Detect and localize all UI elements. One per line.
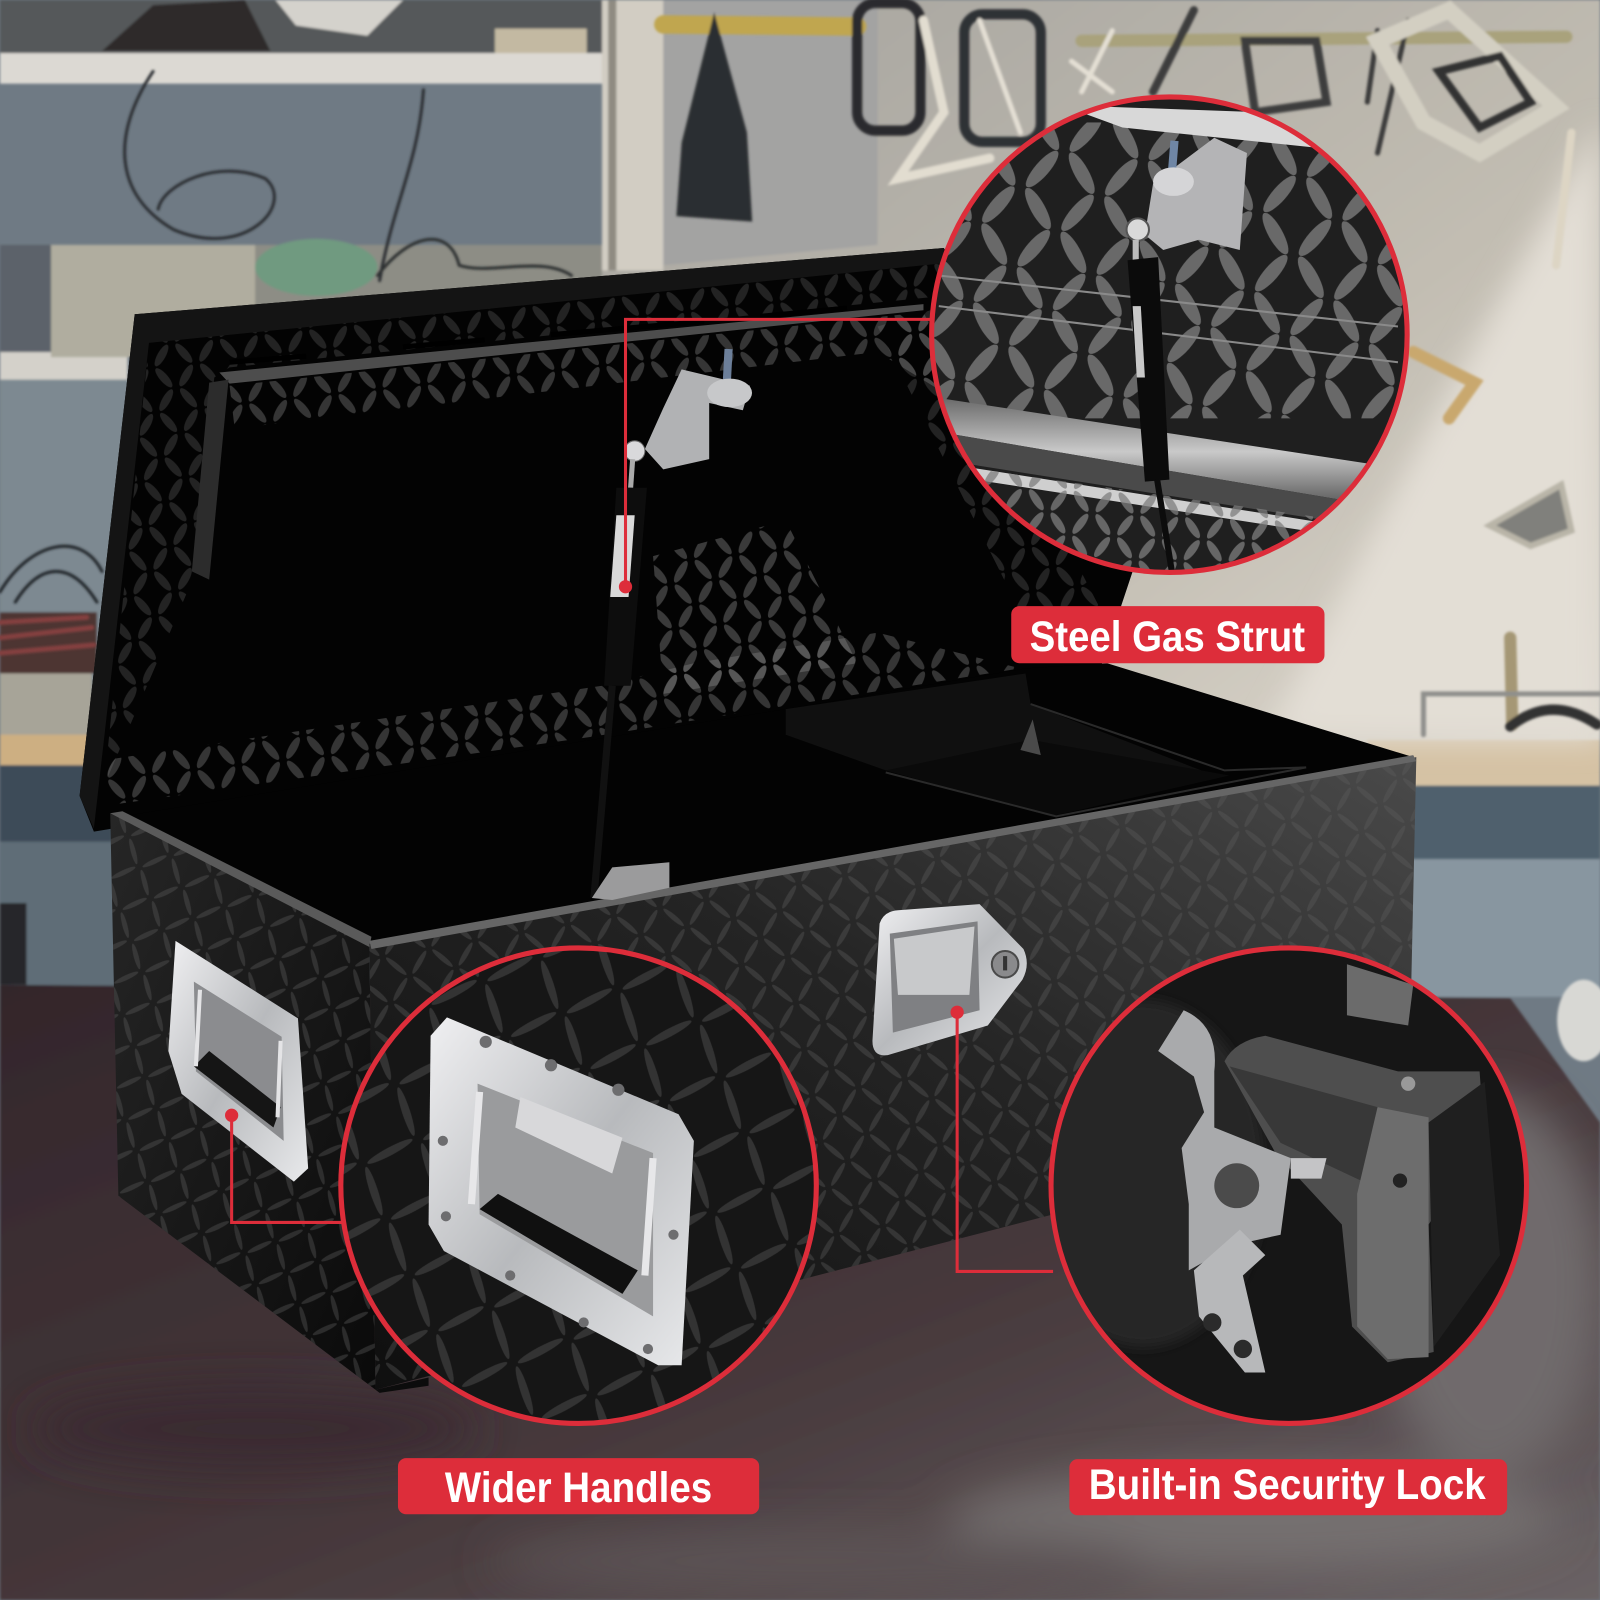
right wall [602,0,1600,745]
lid [80,248,1133,832]
connector: lock [952,1007,1053,1271]
label: built-in security lock: Built-in Security Lock [1089,1461,1486,1509]
lid center reflection [653,520,857,694]
wires [125,71,274,238]
detail circle: security lock [1048,945,1530,1426]
box interior [122,663,1413,944]
label: steel gas strut: Steel Gas Strut [1030,613,1305,661]
shelves [0,53,602,84]
top shelf clutter [0,0,602,55]
tools on wall [0,3,1600,735]
toolbox [80,248,1416,1393]
side handle [168,941,308,1182]
lid lower reflection band [102,633,1020,806]
partition tray [786,673,1306,816]
label: wider handles: Wider Handles [445,1464,712,1512]
gas strut [592,349,752,900]
right counter [1367,740,1600,786]
detail circle: steel gas strut [929,94,1410,575]
connector: handle [227,1110,343,1222]
soft table reflections [31,1092,1600,1592]
front latch [872,904,1027,1055]
lower-left wall [0,245,602,352]
light beam on wall [1265,122,1600,740]
connector: strut [620,319,933,592]
detail circle: wider handles [327,939,837,1439]
left face [110,811,376,1390]
left counter [0,735,92,765]
lid top reflection band [104,263,944,786]
front face [369,755,1416,1393]
table [0,985,1600,1600]
